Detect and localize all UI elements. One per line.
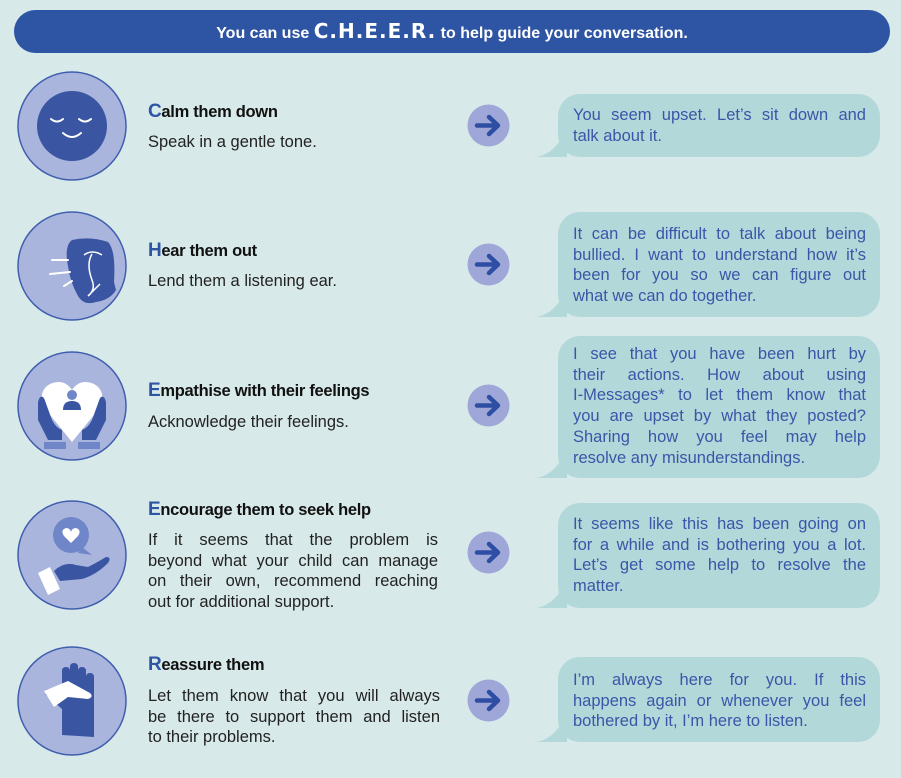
speech bubble 5	[538, 657, 880, 742]
text: encourage	[148, 531, 438, 611]
speech bubble 1: talk about it.	[573, 127, 662, 145]
speech bubble 3: Sharing how you feel may help	[573, 428, 866, 446]
icon: hand holding hand	[17, 646, 127, 756]
arrows	[468, 104, 510, 722]
icon: hand with heart bubble	[17, 500, 127, 610]
speech bubble 5: bothered by it, I’m here to listen.	[573, 712, 808, 730]
title: hear: Hear them out	[148, 240, 257, 261]
icon: calm face	[17, 71, 127, 181]
arrow 5	[468, 680, 510, 722]
speech bubble 3: their actions. How about using	[573, 366, 866, 384]
arrow 3	[468, 384, 510, 426]
speech bubble 1: You seem upset. Let’s sit down and	[573, 106, 866, 124]
header banner: You can use C.H.E.E.R. to help guide your conversation.	[216, 19, 688, 43]
text: encourage: out for additional support.	[148, 593, 334, 611]
text: reassure: Let them know that you will always	[148, 687, 440, 705]
speech bubble 2: bullied. I want to understand how it’s	[573, 246, 866, 264]
arrow 1	[468, 104, 510, 146]
speech bubble 3	[538, 336, 880, 478]
text: reassure	[148, 687, 440, 746]
speech bubble 3: resolve any misunderstandings.	[573, 449, 805, 467]
text: hear: Lend them a listening ear.	[148, 272, 337, 290]
icon: heart in hands	[17, 351, 127, 461]
header banner	[14, 10, 890, 53]
speech bubble 4: Let’s get some help to resolve the	[573, 556, 866, 574]
text: encourage: beyond what your child can manage	[148, 552, 438, 570]
speech bubble 3: I see that you have been hurt by	[573, 345, 866, 363]
title: empathise: Empathise with their feelings	[148, 380, 369, 401]
speech bubble 2: It can be difficult to talk about being	[573, 225, 866, 243]
speech bubble 5: I’m always here for you. If this	[573, 671, 866, 689]
speech bubble 2: been for you so we can figure out	[573, 266, 866, 284]
arrow 4	[468, 532, 510, 574]
speech bubble 1	[538, 94, 880, 157]
arrow 2	[468, 244, 510, 286]
text: calm: Speak in a gentle tone.	[148, 133, 317, 151]
text: reassure: be there to support them and listen	[148, 708, 440, 726]
title: calm: Calm them down	[148, 101, 278, 122]
speech bubble 4: for a while and is bothering you a lot.	[573, 536, 866, 554]
speech bubble 5: happens again or whenever you feel	[573, 692, 866, 710]
text: encourage: If it seems that the problem is	[148, 531, 438, 549]
speech bubble 3: I-Messages* to let them know that	[573, 386, 866, 404]
title: encourage: Encourage them to seek help	[148, 499, 371, 520]
title: reassure: Reassure them	[148, 654, 264, 675]
speech bubble 2	[538, 212, 880, 317]
speech bubble 3: you are upset by what they posted?	[573, 407, 866, 425]
text: encourage: on their own, recommend reaching	[148, 572, 438, 590]
speech bubble 4: matter.	[573, 577, 623, 595]
speech bubble 4: It seems like this has been going on	[573, 515, 866, 533]
speech bubble 4	[538, 503, 880, 608]
icon: ear	[17, 211, 127, 321]
text: reassure: to their problems.	[148, 728, 275, 746]
speech bubble 2: what we can do together.	[573, 287, 756, 305]
text: empathise: Acknowledge their feelings.	[148, 413, 349, 431]
